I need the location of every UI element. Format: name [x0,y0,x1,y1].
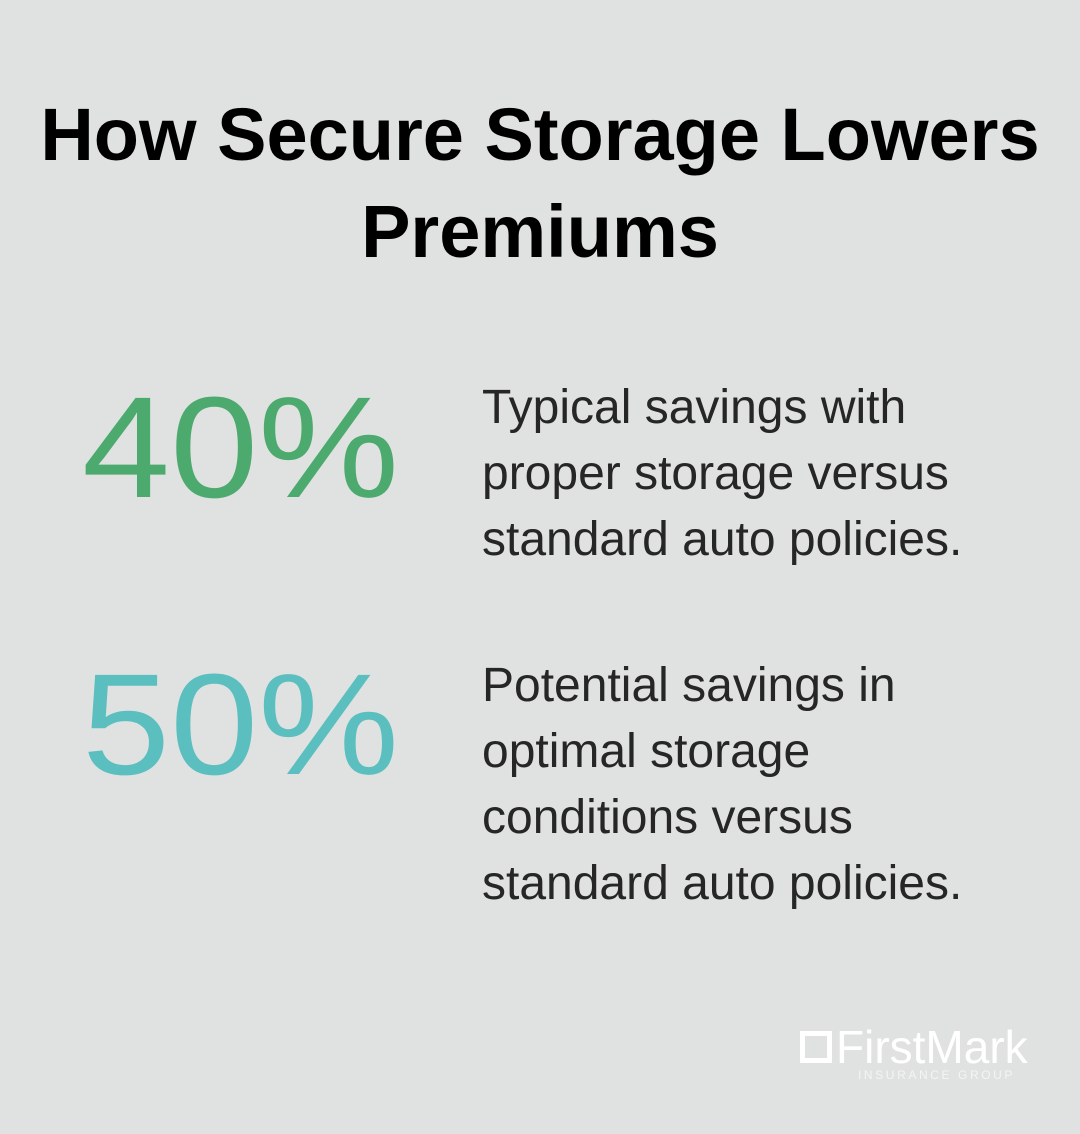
logo subtitle: INSURANCE GROUP [858,1068,1015,1082]
text: 50% description: Potential savings in [482,659,896,712]
logo text: FirstMark [836,1021,1028,1073]
text: 40% description: standard auto policies. [482,513,962,566]
logo [800,1021,1028,1082]
text: 40% description: proper storage versus [482,447,949,500]
text: 50% description: standard auto policies. [482,857,962,910]
stat: 50%: 50% [82,644,399,805]
title: How Secure Storage Lowers [40,93,1040,176]
text: 50% description [482,659,962,910]
title [40,93,1040,273]
text: 50% description: conditions versus [482,791,853,844]
text: 50% description: optimal storage [482,725,810,778]
icon: logo square [800,1031,832,1063]
text: 40% description: Typical savings with [482,381,906,434]
stat: 40%: 40% [82,367,399,528]
text: 40% description [482,381,962,566]
title: Premiums [361,190,719,273]
